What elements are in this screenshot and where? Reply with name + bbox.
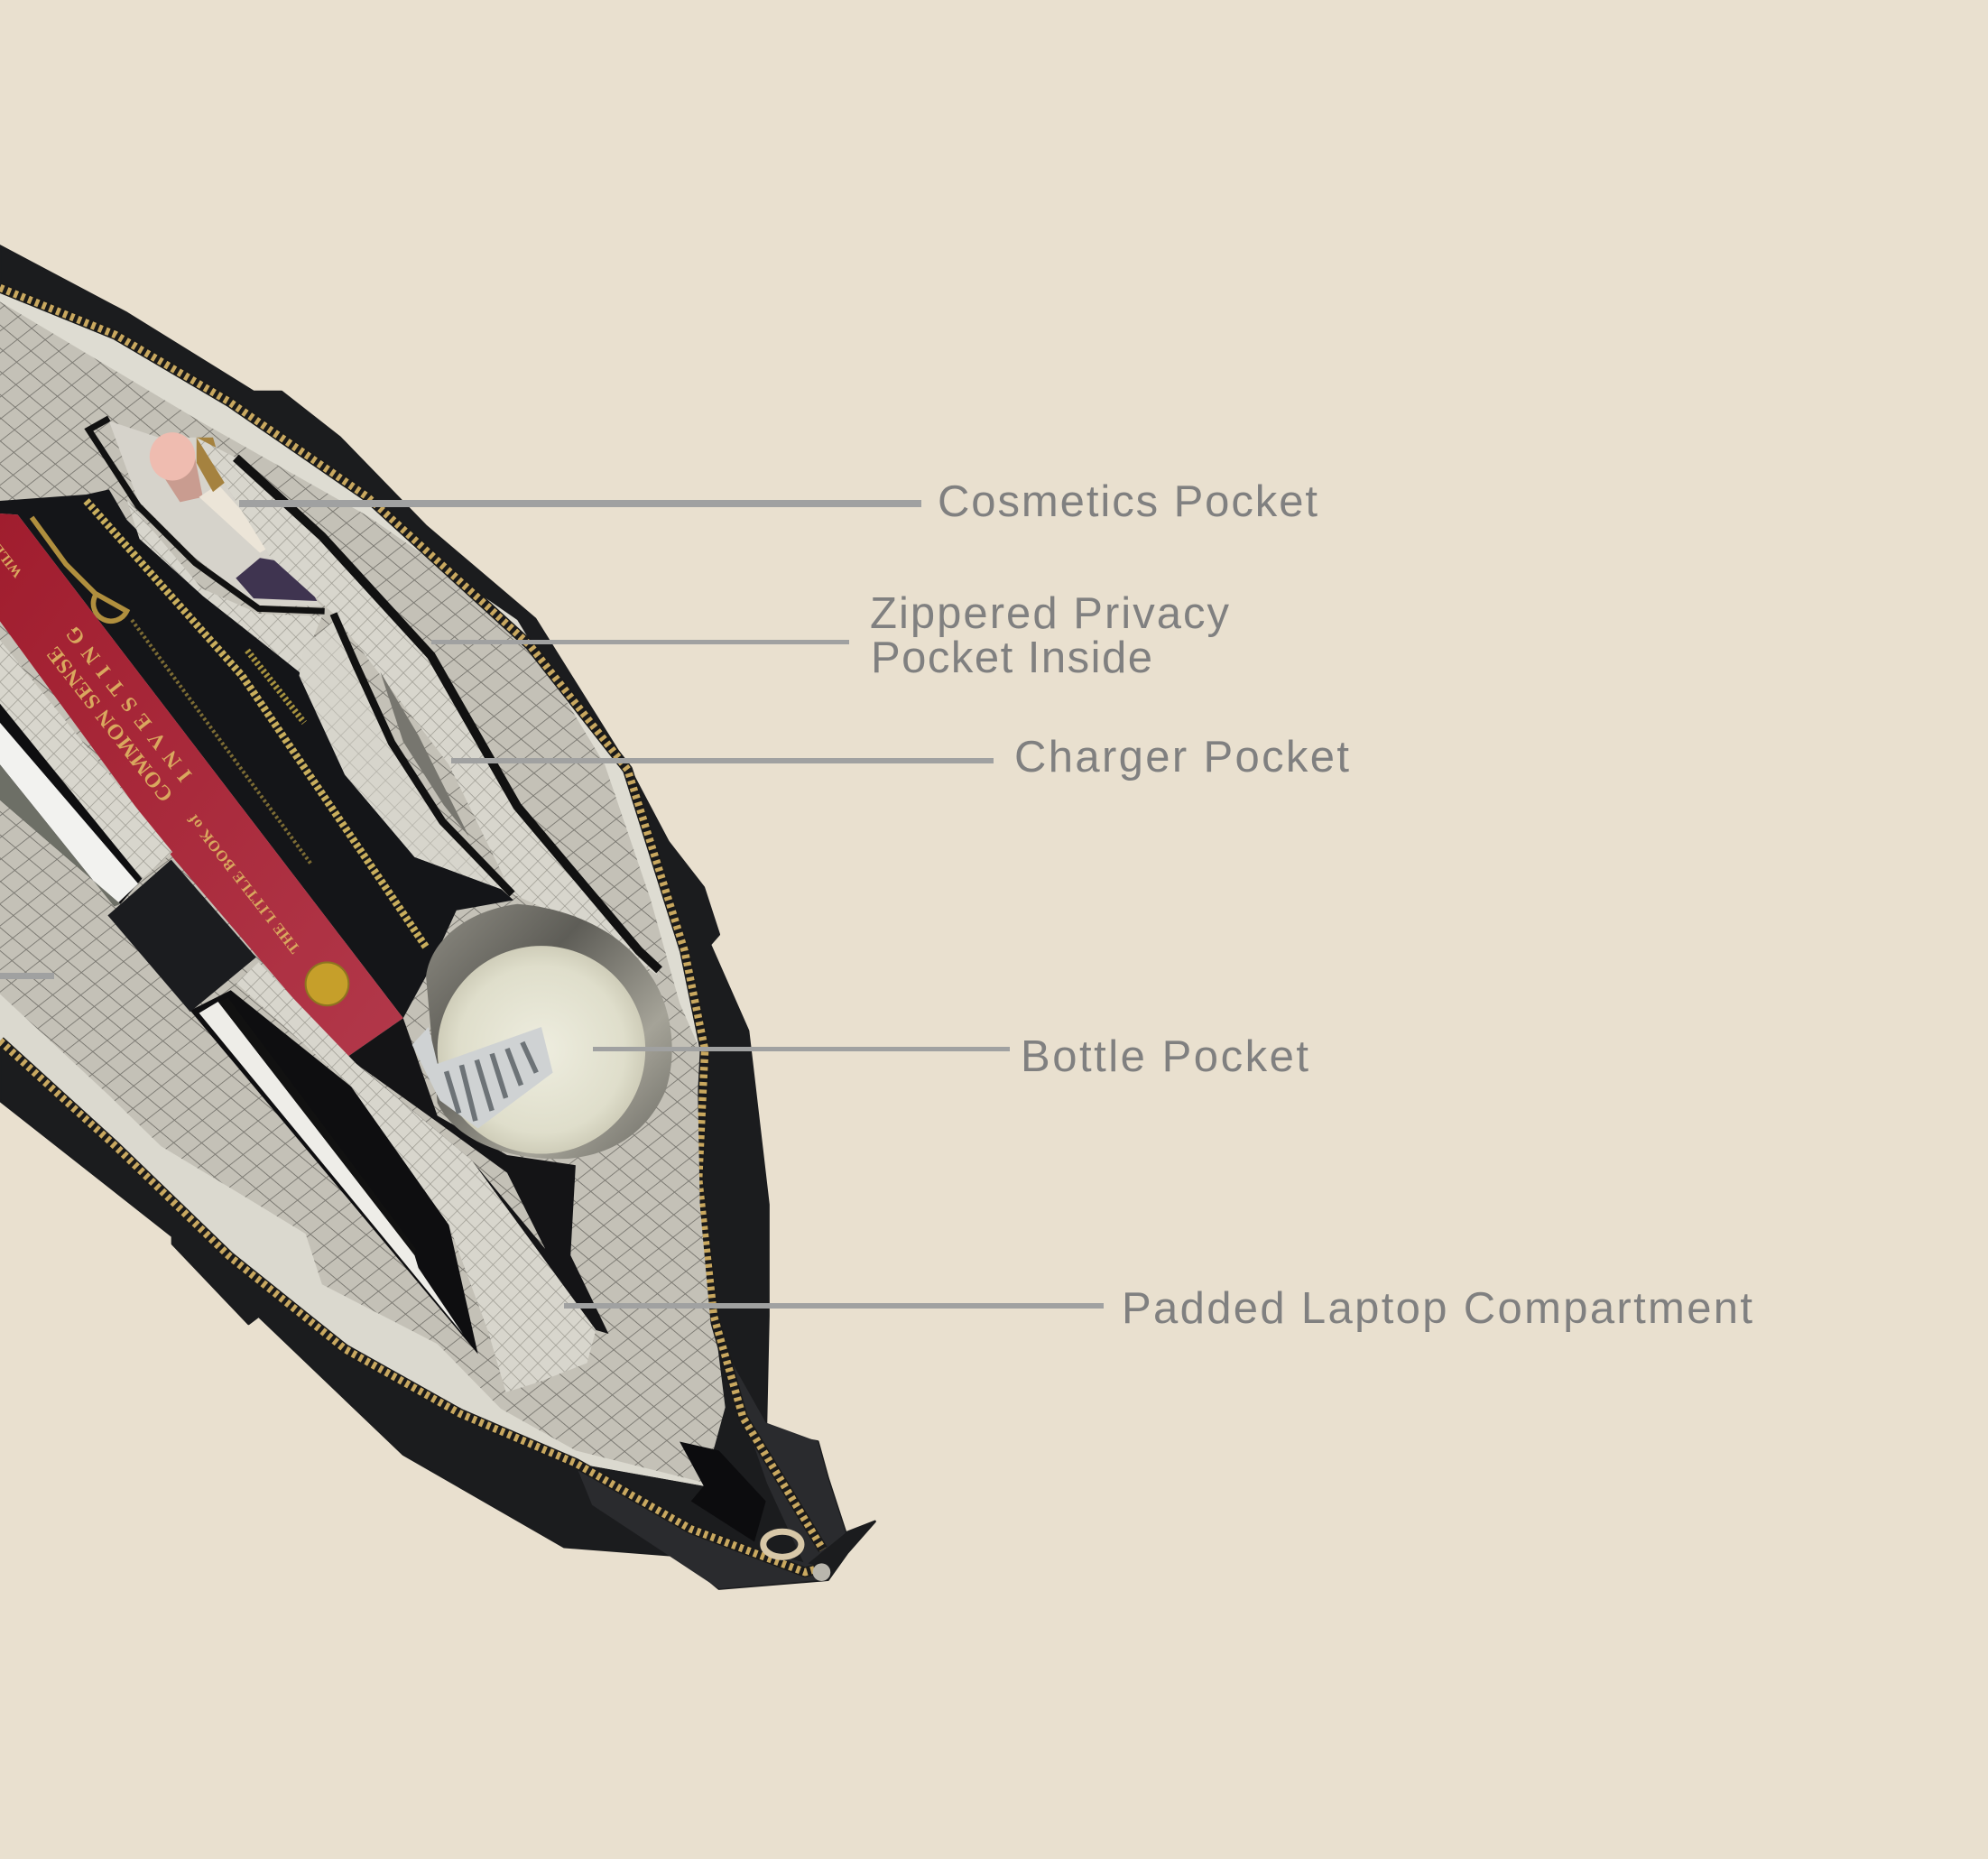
pocket binding xyxy=(88,419,325,611)
wallet zipper xyxy=(87,501,426,948)
padded laptop sleeve xyxy=(236,962,596,1392)
callout: bottle pocket xyxy=(593,1032,1308,1081)
cream tube xyxy=(199,485,273,553)
callout: zippered privacy pocket xyxy=(431,589,1229,682)
panel: padded strip xyxy=(0,641,172,879)
panel: red book xyxy=(0,513,403,1059)
label: Bottle Pocket xyxy=(1021,1032,1308,1081)
panel: dark wallet area xyxy=(0,489,513,1018)
callout: padded laptop compartment xyxy=(564,1284,1752,1333)
panel: cosmetics pocket xyxy=(88,419,325,672)
book title: THE LITTLE BOOK of xyxy=(184,811,303,957)
bag outer shell xyxy=(0,246,874,1588)
label: Charger Pocket xyxy=(1014,733,1349,782)
panel: laptop lower xyxy=(190,990,478,1355)
callout: charger pocket xyxy=(451,733,1349,782)
label: Pocket Inside xyxy=(871,634,1152,682)
dark bottle xyxy=(236,558,317,601)
striped handle xyxy=(412,1027,553,1128)
book title: INVESTING xyxy=(61,622,197,786)
leader line xyxy=(593,1047,1010,1051)
label: Cosmetics Pocket xyxy=(938,477,1318,526)
top zipper xyxy=(0,288,823,1549)
leader line xyxy=(451,758,994,763)
lining light seam bottom xyxy=(0,994,704,1486)
zipper tape bottom xyxy=(576,1465,823,1588)
panel: laptop upper xyxy=(0,704,142,907)
leader line xyxy=(239,500,921,507)
gold clasp xyxy=(32,517,126,621)
bag photograph illustration xyxy=(0,246,874,1588)
black strap tab xyxy=(107,860,256,1012)
label xyxy=(870,589,1229,682)
zipper tape right xyxy=(714,1330,846,1566)
lining xyxy=(0,288,726,1486)
icon: zipper ring xyxy=(763,1531,830,1581)
lipstick xyxy=(150,432,203,502)
panel: dark gap under book xyxy=(345,1018,608,1334)
lining light seam top xyxy=(0,288,705,1052)
panel: mesh behind sleeve xyxy=(361,1068,545,1249)
panel: privacy pocket strip xyxy=(197,438,660,976)
panel: charger pocket xyxy=(300,614,513,894)
label: Zippered Privacy xyxy=(870,589,1229,638)
dark corner xyxy=(680,1441,766,1541)
panel: water bottle xyxy=(412,904,672,1159)
charger binding xyxy=(334,614,513,894)
charger fabric mesh xyxy=(300,621,507,892)
book title: COMMON SENSE xyxy=(42,642,178,806)
gold zip pull xyxy=(197,438,226,492)
leader line xyxy=(564,1303,1104,1309)
gold seal xyxy=(306,962,348,1005)
callout: cosmetics pocket xyxy=(239,477,1318,526)
ruffled fabric xyxy=(126,500,322,672)
leader line stub xyxy=(0,973,54,979)
privacy zipper xyxy=(236,458,660,970)
charger inside xyxy=(381,672,469,837)
bottle cap xyxy=(438,946,645,1154)
label: Padded Laptop Compartment xyxy=(1122,1284,1752,1333)
book title xyxy=(0,533,303,957)
panel: right lining fold xyxy=(576,1065,717,1427)
leader line xyxy=(431,640,849,644)
bottom zipper xyxy=(0,1041,823,1572)
